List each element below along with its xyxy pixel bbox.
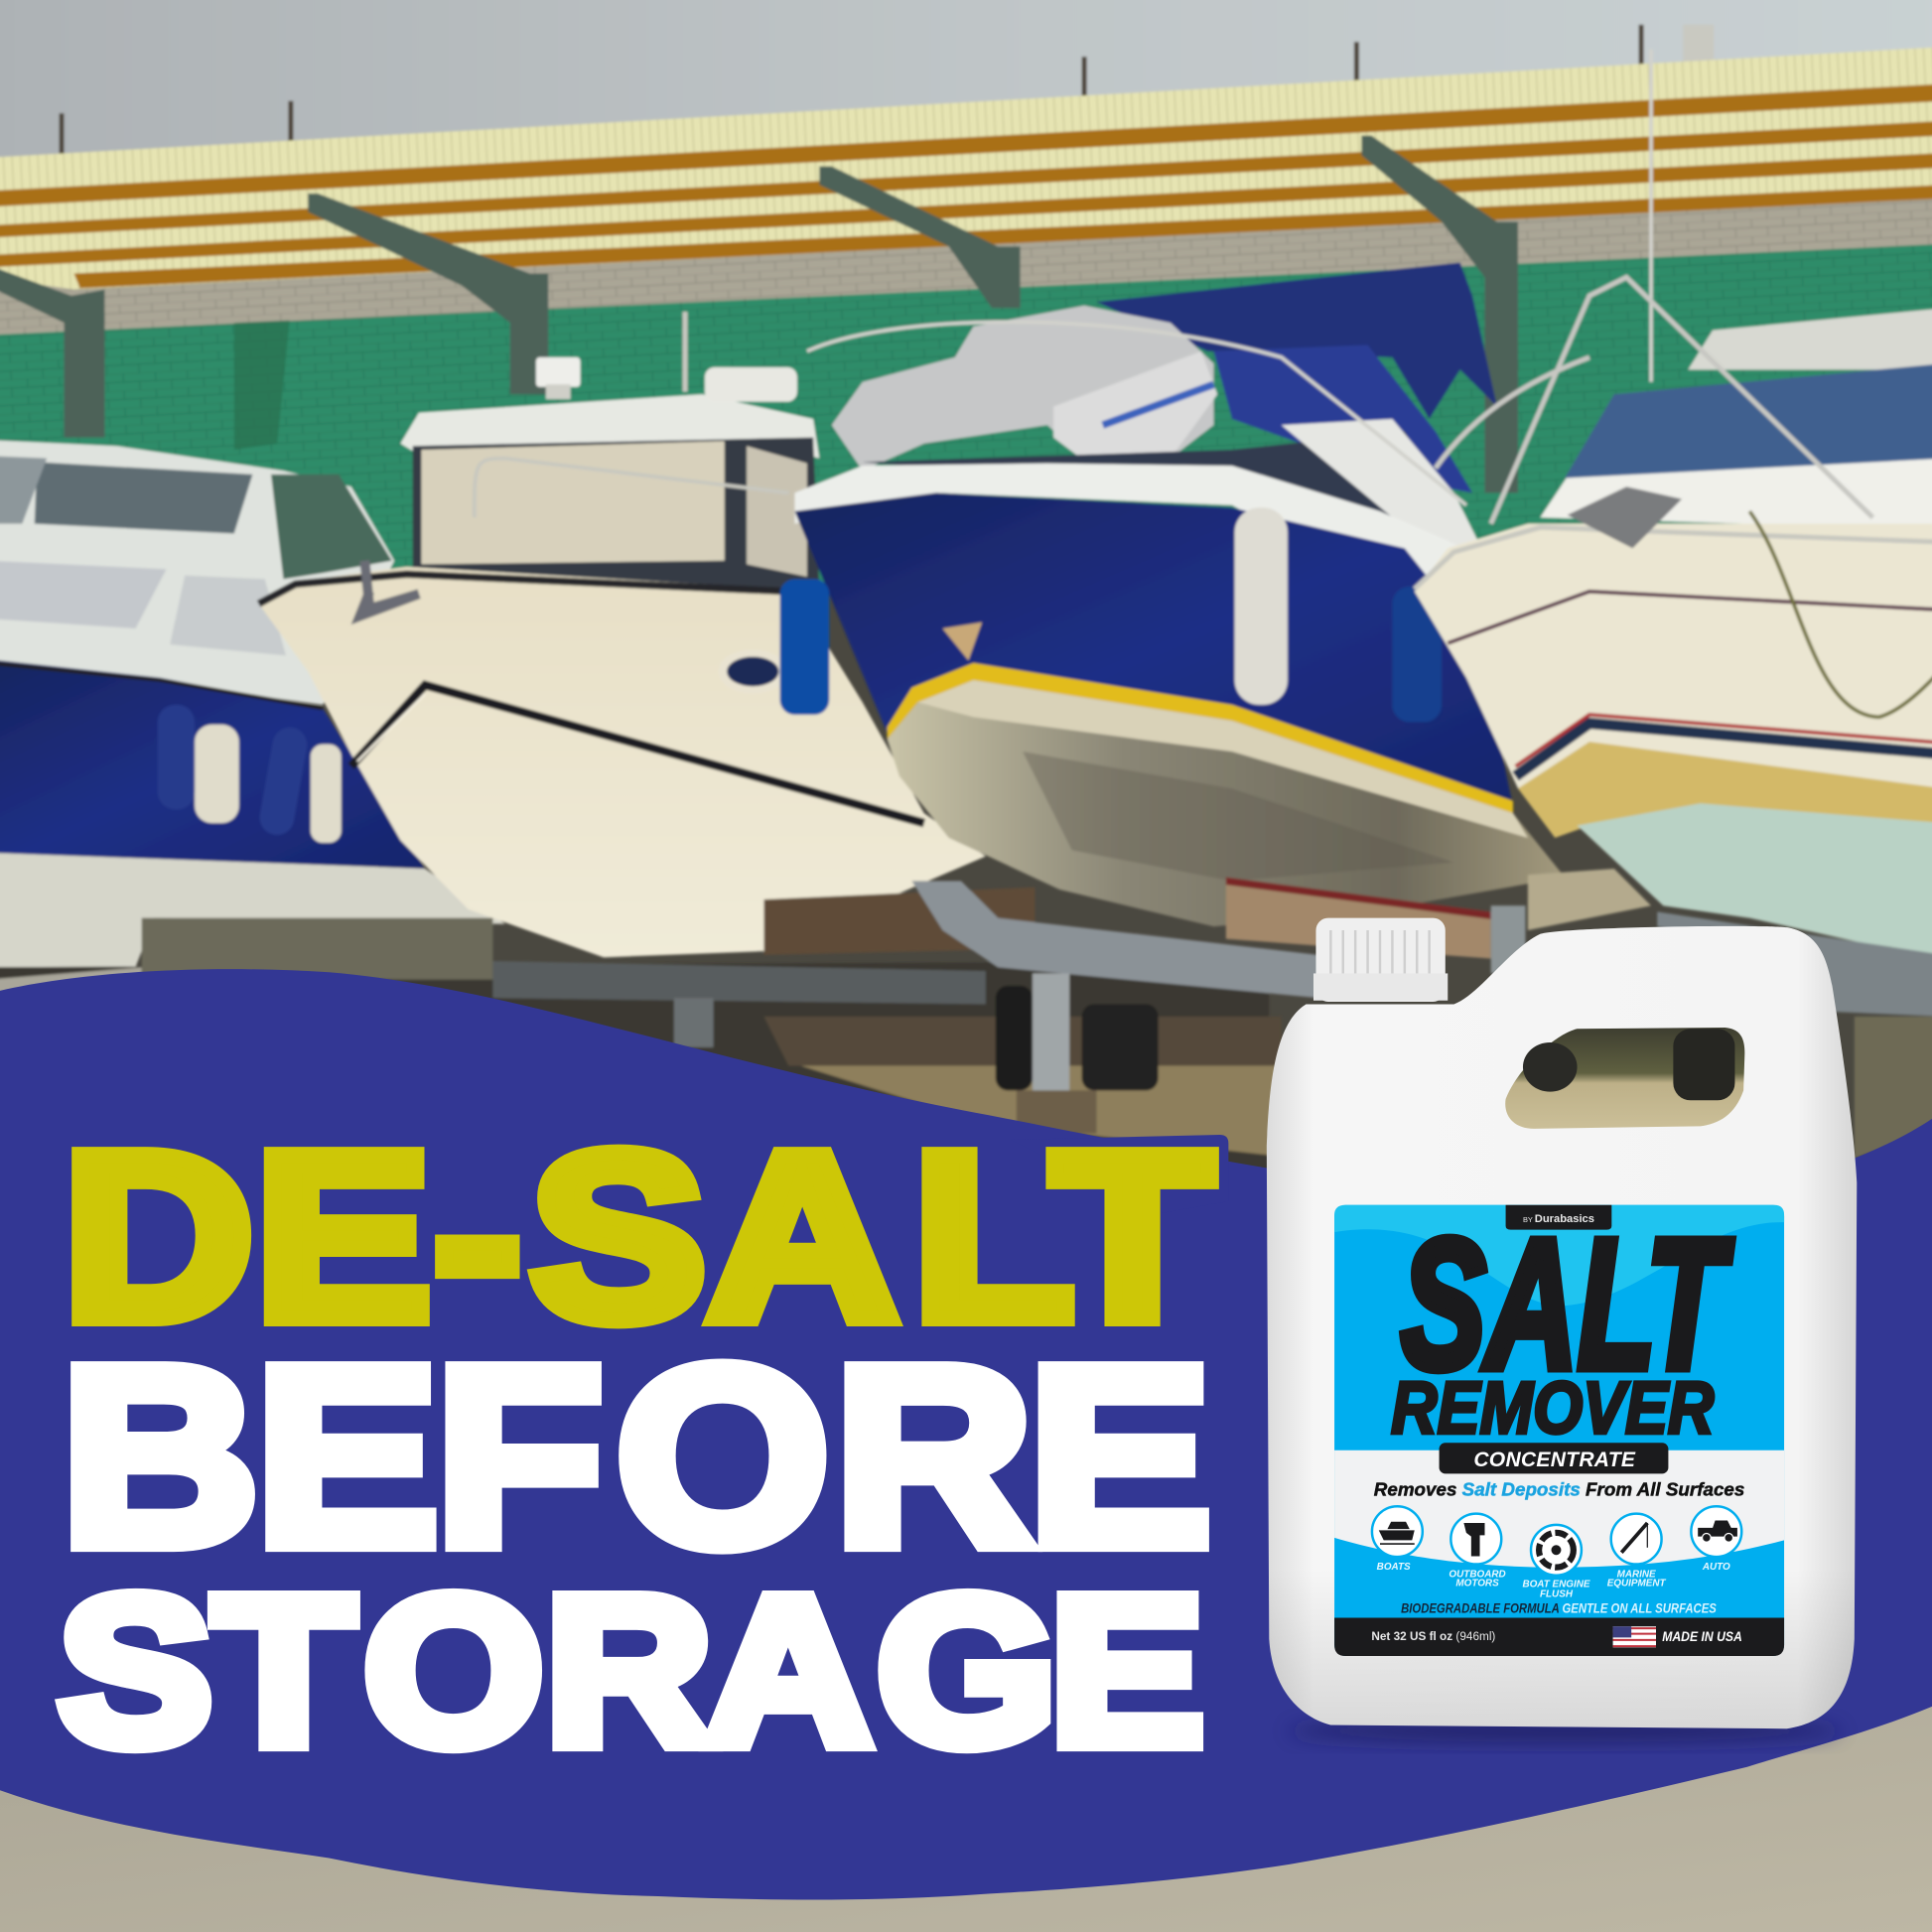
icon: US flag (1613, 1626, 1656, 1647)
wall band (0, 198, 1932, 339)
concentrate badge: CONCENTRATE (1473, 1449, 1636, 1471)
photo: boats stored on trailers under a shelter (0, 0, 1932, 1171)
icon captions: EQUIPMENT (1607, 1578, 1667, 1588)
net volume: Net 32 US fl oz (946ml) (1371, 1630, 1495, 1643)
bottle body (1267, 926, 1857, 1728)
icon: marine equipment (1611, 1514, 1662, 1565)
product label (1334, 1201, 1784, 1656)
made in USA: MADE IN USA (1662, 1629, 1742, 1645)
icon captions: MARINE (1617, 1570, 1656, 1581)
photo base tone (0, 0, 1932, 1182)
product name: REMOVER: REMOVER (1391, 1366, 1715, 1449)
brand tab: BY Durabasics (1523, 1213, 1594, 1225)
boat 2: cream cabin boat (259, 312, 986, 957)
bottle shadow (1288, 1721, 1842, 1742)
headline (59, 1103, 1213, 1789)
brand tab (1506, 1205, 1611, 1230)
icon: auto (1691, 1506, 1741, 1557)
headline line: DE-SALT: DE-SALT (63, 1103, 1213, 1369)
icon captions: AUTO (1702, 1562, 1730, 1573)
icon captions: BOAT ENGINE (1522, 1579, 1590, 1589)
icon: boats (1372, 1506, 1423, 1557)
bottle cap (1313, 918, 1448, 1002)
handle opening (1505, 1028, 1744, 1129)
icon: boat engine flush (1531, 1525, 1582, 1576)
product bottle (1267, 918, 1857, 1742)
icon captions: MOTORS (1455, 1578, 1499, 1588)
icon captions: OUTBOARD (1449, 1570, 1506, 1581)
icon captions: BOATS (1377, 1562, 1411, 1573)
poles above roof (62, 25, 1641, 158)
steel shelter arms and posts (0, 136, 1518, 492)
label background (1334, 1205, 1784, 1656)
boat 3: large navy boat with dirty hull (780, 50, 1651, 926)
headline line: BEFORE: BEFORE (61, 1314, 1211, 1598)
label footer bar (1334, 1618, 1784, 1656)
white band (1334, 1450, 1784, 1568)
concrete ground strip (0, 1688, 1932, 1932)
boat 1: navy left boat (0, 440, 505, 967)
green netted wall (0, 244, 1932, 592)
concentrate badge (1440, 1443, 1668, 1473)
product name: SALT: SALT (1401, 1201, 1732, 1408)
corrugated roof (0, 47, 1932, 290)
sky (0, 0, 1932, 246)
biodegradable line: BIODEGRADABLE FORMULA GENTLE ON ALL SURFACES (1401, 1601, 1717, 1616)
icon captions: FLUSH (1540, 1588, 1574, 1599)
headline line: STORAGE: STORAGE (59, 1554, 1203, 1789)
blue wave panel (0, 969, 1932, 1899)
trailers and ground under the boats (0, 869, 1932, 1171)
icon: outboard motors (1450, 1514, 1501, 1565)
boat 4: cream right boat (1415, 277, 1932, 961)
wooden beams (0, 83, 1932, 288)
icon captions (1377, 1562, 1730, 1599)
chimney (1683, 25, 1714, 62)
tagline: Removes Salt Deposits From All Surfaces (1374, 1479, 1744, 1500)
